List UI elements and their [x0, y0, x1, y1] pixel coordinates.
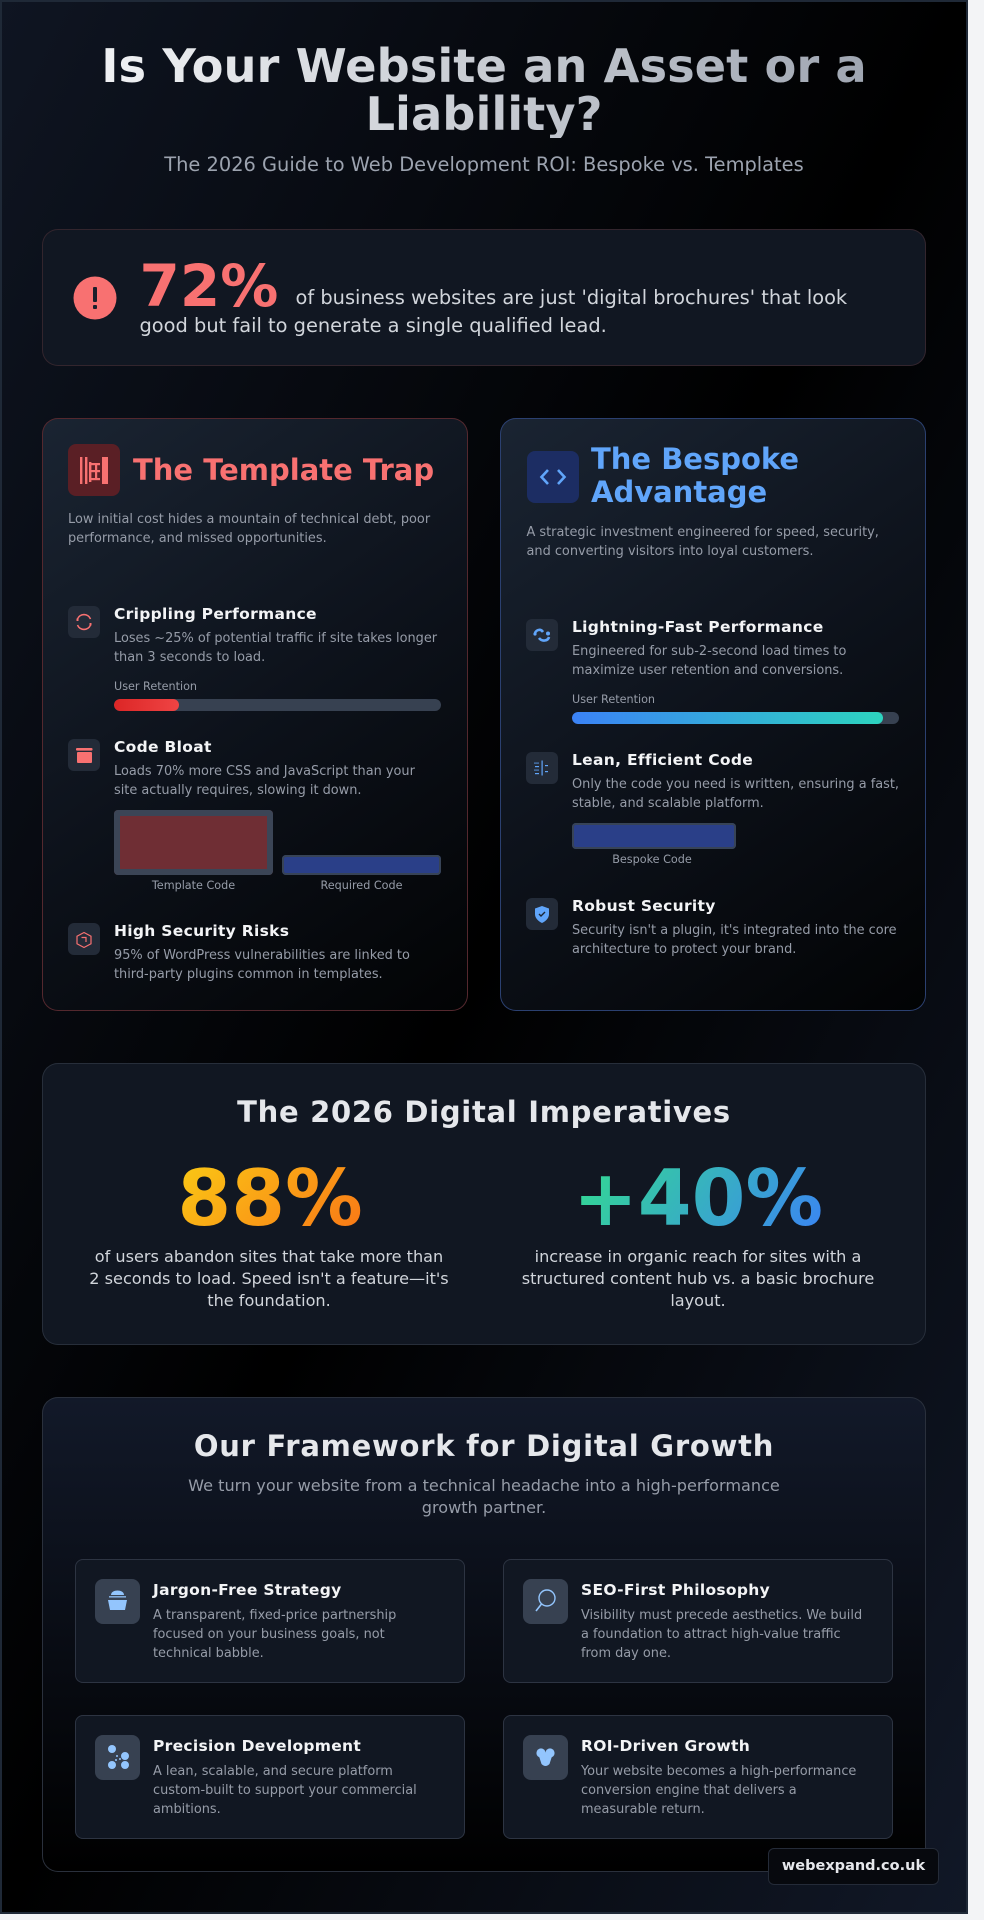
feature text: stable, and scalable platform. — [572, 796, 764, 811]
feature text: Engineered for sub-2-second load times to — [572, 644, 846, 659]
feature text: architecture to protect your brand. — [572, 942, 796, 957]
feature title: Lean, Efficient Code — [572, 751, 753, 769]
icon: magnifier — [523, 1579, 568, 1624]
card: seo-first philosophy — [503, 1559, 893, 1683]
heading — [591, 442, 799, 509]
feature text — [114, 764, 415, 798]
icon: refresh — [68, 606, 100, 638]
label: template code: Template Code — [152, 879, 235, 892]
card text: technical babble. — [153, 1646, 264, 1661]
feature text — [572, 777, 899, 811]
card text: ambitions. — [153, 1802, 221, 1817]
card text — [581, 1764, 856, 1817]
icon: shield — [526, 898, 558, 930]
panel: 72% callout — [42, 229, 926, 366]
label: User Retention — [114, 680, 197, 693]
bar: bespoke code — [572, 823, 736, 849]
panel: the bespoke advantage — [500, 418, 926, 1011]
card text: A transparent, fixed-price partnership — [153, 1608, 396, 1623]
bar: required code — [282, 855, 441, 875]
card text: custom-built to support your commercial — [153, 1783, 417, 1798]
statistic: 88%: 88% — [177, 1154, 363, 1244]
card text: focused on your business goals, not — [153, 1627, 385, 1642]
feature text: Loses ~25% of potential traffic if site takes longer — [114, 631, 437, 646]
intro text: We turn your website from a technical headache into a high-performance — [188, 1476, 780, 1494]
heading: The 2026 Digital Imperatives — [237, 1094, 731, 1128]
label: bespoke code: Bespoke Code — [612, 853, 692, 866]
feature text: than 3 seconds to load. — [114, 650, 265, 665]
feature: high security risks — [68, 922, 410, 982]
card text: A lean, scalable, and secure platform — [153, 1764, 393, 1779]
statistic text: of users abandon sites that take more than — [95, 1246, 443, 1266]
card text: conversion engine that delivers a — [581, 1783, 797, 1798]
feature: robust security — [526, 897, 897, 957]
feature title: Robust Security — [572, 897, 716, 915]
feature text: site actually requires, slowing it down. — [114, 783, 362, 798]
heading: Advantage — [591, 475, 767, 509]
heading: The Template Trap — [133, 453, 434, 487]
title: Is Your Website an Asset or a — [101, 39, 867, 93]
icon: hexagon — [68, 923, 100, 955]
feature text — [572, 644, 846, 678]
heading: The Bespoke — [591, 442, 799, 476]
card title: Jargon-Free Strategy — [153, 1581, 342, 1599]
feature: lean efficient code — [526, 751, 899, 866]
statistic text — [89, 1246, 449, 1310]
title: Liability? — [365, 87, 602, 141]
card text: Visibility must precede aesthetics. We build — [581, 1608, 862, 1623]
statistic text: increase in organic reach for sites with a — [535, 1246, 861, 1266]
statistic column: 88% — [89, 1154, 449, 1310]
progress bar — [114, 699, 441, 711]
statistic text: 2 seconds to load. Speed isn't a feature—it's — [89, 1269, 449, 1288]
title — [70, 42, 898, 138]
icon: advisor — [95, 1579, 140, 1624]
feature text: maximize user retention and conversions. — [572, 663, 843, 678]
card text: from day one. — [581, 1646, 671, 1661]
intro text: A strategic investment engineered for speed, security, — [526, 524, 879, 540]
progress bar — [572, 712, 899, 724]
statistic column: +40% — [522, 1154, 874, 1310]
statistic text: layout. — [670, 1291, 726, 1310]
icon: alert circle — [74, 276, 116, 320]
feature title: Lightning-Fast Performance — [572, 618, 824, 636]
card: jargon-free strategy — [75, 1559, 465, 1683]
statistic text: the foundation. — [207, 1291, 331, 1310]
feature: crippling performance — [68, 605, 441, 711]
label: required code: Required Code — [320, 879, 402, 892]
intro text: Low initial cost hides a mountain of technical debt, poor — [68, 512, 430, 527]
subtitle: The 2026 Guide to Web Development ROI: Bespoke vs. Templates — [164, 153, 804, 176]
feature text: third-party plugins common in templates. — [114, 967, 383, 982]
feature text: Loads 70% more CSS and JavaScript than your — [114, 764, 415, 779]
feature: lightning-fast performance — [526, 618, 899, 724]
card text: a foundation to attract high-value traffic — [581, 1627, 841, 1642]
card text — [581, 1608, 862, 1661]
panel: our framework for digital growth — [42, 1397, 926, 1872]
intro text: performance, and missed opportunities. — [68, 531, 327, 546]
statistic: 72%: 72% — [140, 252, 278, 320]
feature text — [114, 631, 438, 665]
card text: measurable return. — [581, 1802, 705, 1817]
callout text: of business websites are just 'digital brochures' that look good but fail to generate a single qualified lead. — [140, 286, 847, 337]
feature title: Code Bloat — [114, 738, 212, 756]
card title: ROI-Driven Growth — [581, 1737, 750, 1755]
badge: webexpand.co.uk — [768, 1848, 939, 1885]
feature text — [572, 923, 897, 957]
bar: template code — [114, 810, 273, 875]
intro text: growth partner. — [422, 1498, 546, 1517]
intro text — [188, 1476, 780, 1517]
panel: the template trap — [42, 418, 468, 1011]
statistic text — [522, 1246, 874, 1310]
card: precision development — [75, 1715, 465, 1839]
icon: template layout — [68, 444, 120, 496]
icon: split lines — [526, 752, 558, 784]
intro text — [68, 512, 430, 546]
icon: code brackets — [526, 451, 578, 503]
feature text: 95% of WordPress vulnerabilities are linked to — [114, 948, 410, 963]
badge: webexpand.co.uk: webexpand.co.uk — [782, 1858, 925, 1874]
label: User Retention — [572, 693, 655, 706]
card: roi-driven growth — [503, 1715, 893, 1839]
feature text: Only the code you need is written, ensuring a fast, — [572, 777, 899, 792]
icon: nodes — [95, 1735, 140, 1780]
feature title: Crippling Performance — [114, 605, 317, 623]
card title: Precision Development — [153, 1737, 361, 1755]
card text — [153, 1764, 417, 1817]
icon: speed — [526, 619, 558, 651]
feature text — [114, 948, 410, 982]
feature title: High Security Risks — [114, 922, 289, 940]
feature text: Security isn't a plugin, it's integrated into the core — [572, 923, 897, 938]
icon: growth — [523, 1735, 568, 1780]
icon: archive box — [68, 739, 100, 771]
card text — [153, 1608, 396, 1661]
card text: Your website becomes a high-performance — [581, 1764, 856, 1779]
feature: code bloat — [68, 738, 441, 892]
panel: the 2026 digital imperatives — [42, 1063, 926, 1345]
statistic: +40%: +40% — [573, 1154, 823, 1244]
intro text — [526, 524, 879, 559]
heading: Our Framework for Digital Growth — [194, 1428, 774, 1462]
intro text: and converting visitors into loyal customers. — [526, 544, 813, 559]
statistic text: structured content hub vs. a basic brochure — [522, 1269, 874, 1288]
card title: SEO-First Philosophy — [581, 1581, 770, 1599]
